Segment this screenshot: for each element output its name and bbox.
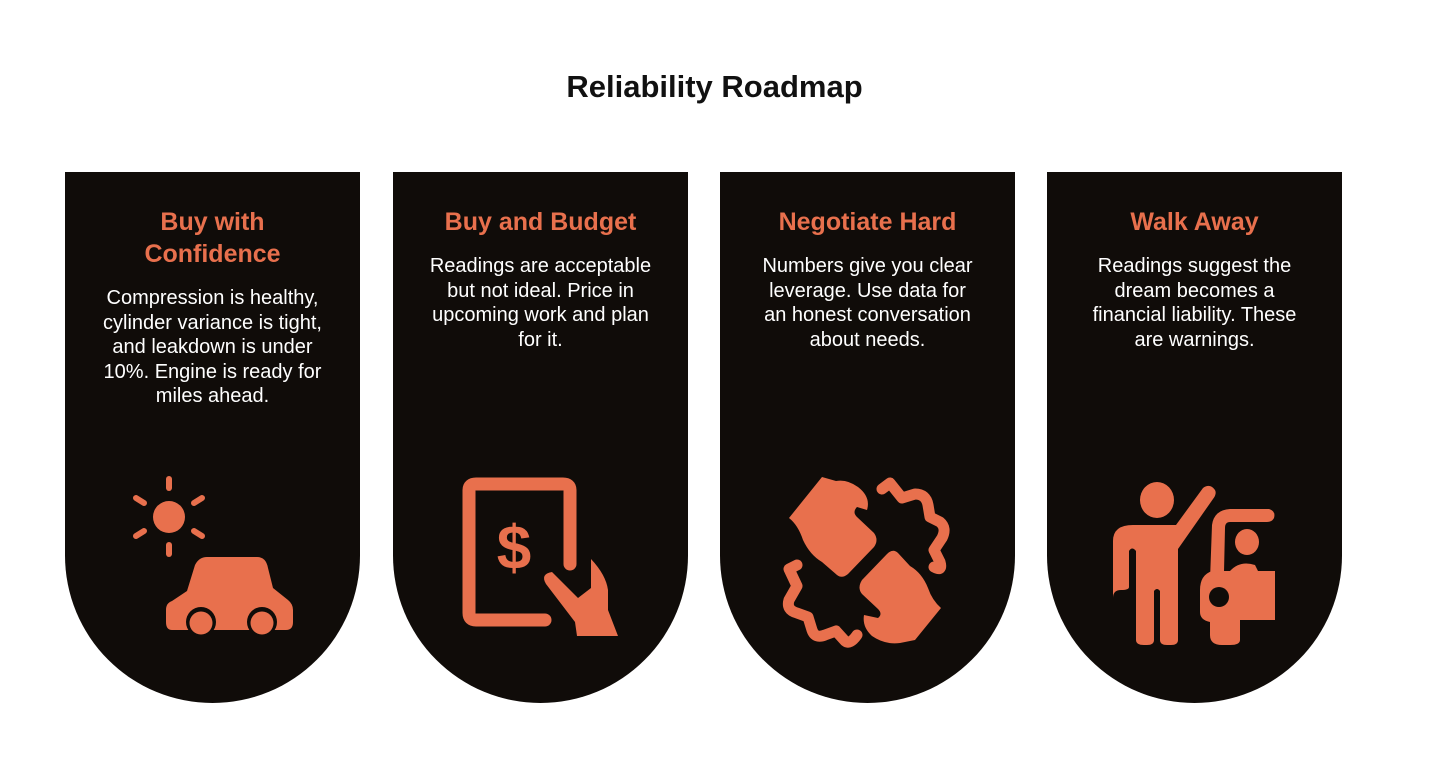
heading: Walk Away — [1130, 208, 1259, 236]
icon: sun and car — [133, 476, 293, 634]
text block: about needs. — [810, 328, 925, 350]
text block — [103, 287, 322, 407]
panel: negotiate hard — [720, 172, 1015, 703]
text block: leverage. Use data for — [769, 280, 966, 302]
heading: Confidence — [144, 240, 281, 268]
heading: Buy and Budget — [445, 208, 636, 236]
panel: buy and budget — [393, 172, 688, 703]
heading: Negotiate Hard — [779, 208, 956, 236]
text block — [430, 255, 651, 350]
text block: cylinder variance is tight, — [103, 312, 322, 334]
heading: Buy with — [160, 208, 265, 236]
icon: person waving and forklift — [1113, 482, 1275, 645]
icon: tablet with dollar and hand — [462, 478, 618, 636]
text block — [1092, 255, 1296, 350]
text block — [762, 255, 973, 350]
icon: handshake — [782, 477, 950, 648]
text block: for it. — [518, 328, 563, 350]
text block: Numbers give you clear — [762, 255, 973, 277]
heading — [144, 208, 281, 268]
icon: tablet with dollar and hand: $ — [497, 514, 531, 583]
text block: are warnings. — [1134, 328, 1255, 350]
text block: 10%. Engine is ready for — [104, 360, 321, 382]
title: Reliability Roadmap — [566, 69, 863, 104]
text block: Compression is healthy, — [107, 287, 318, 309]
text block: Readings are acceptable — [430, 255, 651, 277]
text block: Readings suggest the — [1098, 255, 1291, 277]
panel: walk away — [1047, 172, 1342, 703]
text block: and leakdown is under — [112, 336, 313, 358]
panel: buy with confidence — [65, 172, 360, 703]
text block: but not ideal. Price in — [447, 280, 634, 302]
text block: miles ahead. — [156, 385, 269, 407]
text block: dream becomes a — [1114, 280, 1275, 302]
text block: financial liability. These — [1093, 304, 1296, 326]
text block: an honest conversation — [764, 304, 971, 326]
text block: upcoming work and plan — [432, 304, 649, 326]
